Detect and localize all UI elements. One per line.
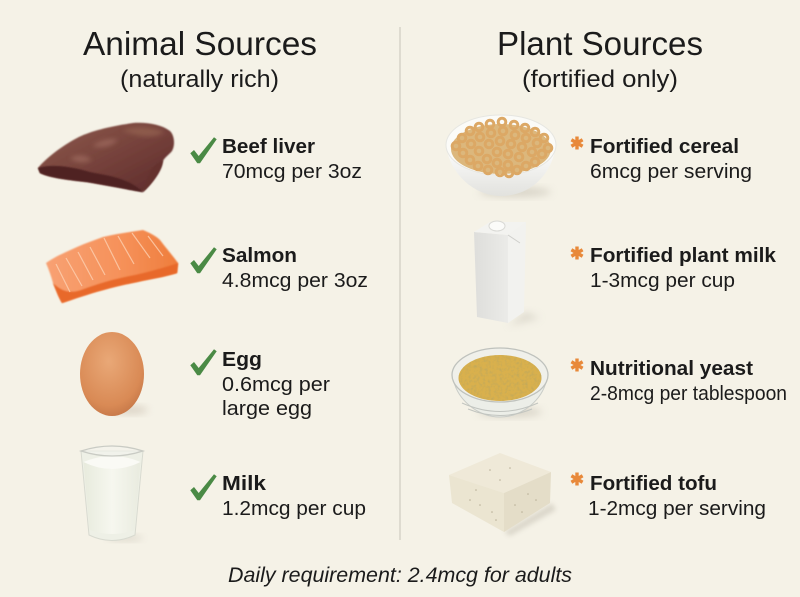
label: fortified plant milk: [590, 245, 777, 292]
label: salmon: 4.8mcg per 3oz: [222, 269, 368, 292]
check mark: egg: [190, 349, 217, 375]
check mark: milk: [190, 474, 217, 500]
label: nutritional yeast: Nutritional yeast: [590, 358, 753, 380]
label: egg: large egg: [222, 397, 312, 420]
label: salmon: [222, 245, 368, 292]
asterisk: nutritional yeast: [571, 358, 583, 372]
icon: fortified tofu: [449, 453, 556, 536]
label: milk: [222, 473, 366, 520]
icon: bowl of cereal: [446, 115, 556, 197]
label: egg: [222, 349, 330, 420]
label: beef liver: Beef liver: [222, 136, 315, 158]
check mark: beef liver: [190, 137, 217, 163]
icon: salmon fillet: [46, 230, 178, 303]
label: fortified cereal: [590, 136, 752, 183]
icon: egg: [80, 332, 148, 416]
label: fortified cereal: 6mcg per serving: [590, 160, 752, 183]
label: fortified cereal: Fortified cereal: [590, 136, 739, 158]
heading: animal sources: (naturally rich): [120, 66, 279, 93]
column divider: [399, 27, 401, 540]
heading: plant sources: [497, 25, 703, 93]
asterisk: fortified cereal: [571, 136, 583, 150]
label: nutritional yeast: [590, 358, 787, 405]
check mark: salmon: [190, 247, 217, 273]
icon: plant milk carton: [474, 221, 540, 326]
icon: beef liver: [38, 123, 174, 192]
label: nutritional yeast: 2-8mcg per tablespoon: [590, 382, 787, 405]
icon: glass of milk: [81, 446, 143, 541]
label: egg: 0.6mcg per: [222, 373, 330, 396]
heading: plant sources: (fortified only): [522, 66, 678, 93]
label: milk: 1.2mcg per cup: [222, 497, 366, 520]
asterisk: fortified plant milk: [571, 246, 583, 260]
asterisk: fortified tofu: [571, 472, 583, 486]
icon: nutritional yeast bowl: [452, 348, 548, 417]
label: fortified plant milk: 1-3mcg per cup: [590, 269, 735, 292]
label: beef liver: 70mcg per 3oz: [222, 160, 362, 183]
heading: animal sources: [83, 25, 317, 93]
label: fortified tofu: 1-2mcg per serving: [588, 497, 766, 520]
label: egg: Egg: [222, 349, 262, 371]
footer note: Daily requirement: 2.4mcg for adults: [228, 564, 573, 587]
label: milk: Milk: [222, 473, 267, 495]
heading: animal sources: Animal Sources: [83, 25, 317, 62]
label: fortified tofu: Fortified tofu: [590, 473, 717, 495]
label: salmon: Salmon: [222, 245, 297, 267]
label: fortified plant milk: Fortified plant milk: [590, 245, 777, 267]
heading: plant sources: Plant Sources: [497, 25, 703, 62]
label: beef liver: [222, 136, 362, 183]
label: fortified tofu: [588, 473, 766, 520]
